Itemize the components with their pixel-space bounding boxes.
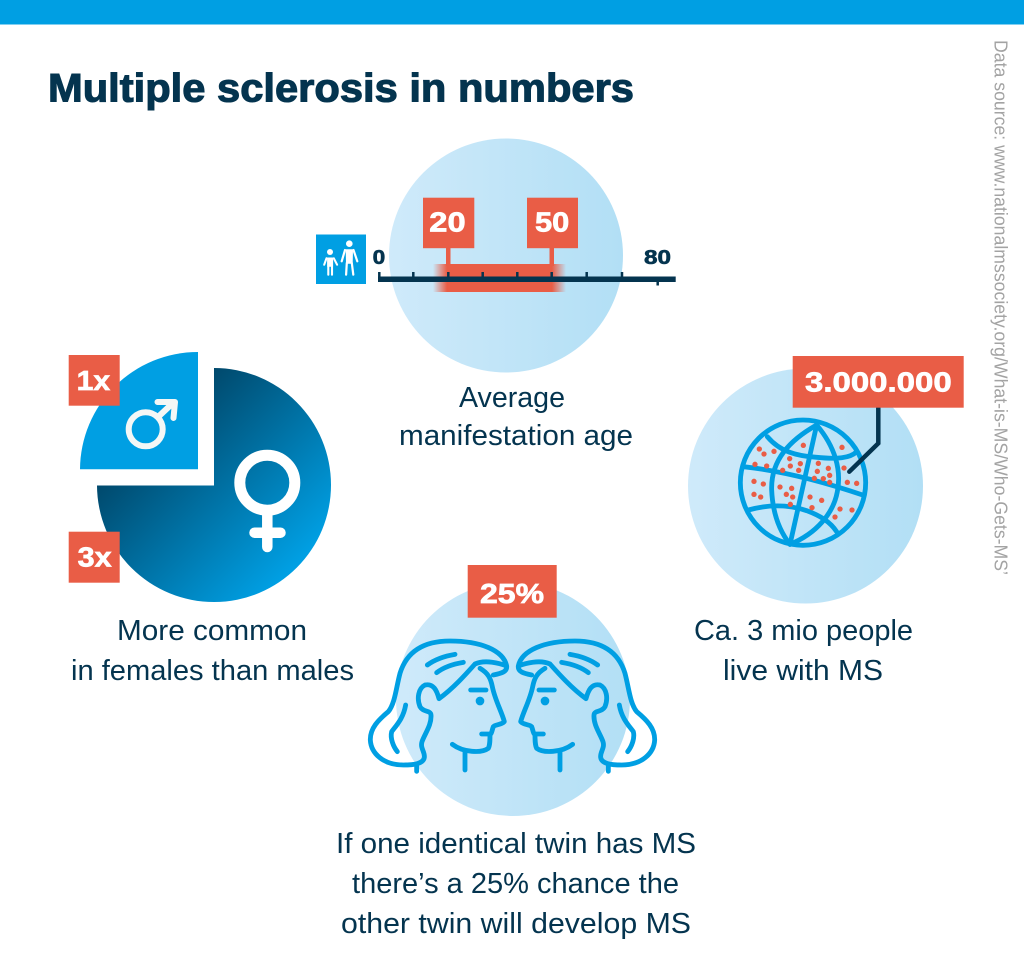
background circle: age — [389, 138, 623, 372]
badge: 3x — [69, 532, 120, 583]
pie slice: female — [97, 368, 331, 602]
marker: 50: 50 — [535, 207, 569, 238]
badge: 3.000.000 — [793, 356, 964, 408]
icon: female symbol — [240, 455, 295, 547]
data source: Data source: www.nationalmssociety.org/What-is-MS/Who-Gets-MS’ — [990, 40, 1010, 575]
caption: gender — [71, 615, 354, 687]
caption: age: Average — [459, 382, 565, 414]
icon: male symbol — [129, 402, 175, 446]
top bar — [0, 0, 1024, 24]
age range band — [433, 264, 566, 292]
caption: age: manifestation age — [399, 420, 633, 452]
badge: 3x: 3x — [78, 542, 112, 573]
marker: 20 — [423, 198, 474, 266]
caption: age — [399, 382, 633, 452]
icon: left twin head — [370, 641, 507, 771]
marker: 20: 20 — [429, 207, 466, 238]
caption: twins — [336, 828, 696, 940]
caption: gender: in females than males — [71, 655, 354, 687]
badge: 1x: 1x — [77, 365, 111, 396]
caption: gender: More common — [117, 615, 307, 647]
background circle: twins — [396, 582, 630, 816]
age axis — [378, 272, 676, 286]
marker: 50 — [527, 198, 578, 266]
icon: globe with dots — [740, 420, 866, 545]
leader line — [849, 405, 878, 472]
caption: twins: If one identical twin has MS — [336, 828, 696, 860]
axis label: 80: 80 — [644, 247, 671, 269]
axis label: 0: 0 — [373, 247, 385, 269]
badge: 25% — [468, 565, 557, 618]
caption: people: live with MS — [723, 655, 883, 687]
background circle: globe — [688, 368, 923, 604]
panel: twins — [336, 565, 696, 940]
caption: twins: there’s a 25% chance the — [352, 868, 679, 900]
icon: right twin head — [518, 641, 655, 771]
badge: 1x — [69, 355, 120, 406]
icon: parent and child — [316, 234, 366, 284]
caption: twins: other twin will develop MS — [341, 908, 691, 940]
caption: people: Ca. 3 mio people — [694, 615, 913, 647]
title: Multiple sclerosis in numbers — [48, 66, 634, 110]
badge: 25%: 25% — [480, 578, 544, 609]
caption: people — [694, 615, 913, 687]
panel: global prevalence — [688, 356, 964, 687]
panel: manifestation age — [316, 138, 676, 452]
panel: gender ratio — [69, 352, 354, 687]
pie slice: male — [80, 352, 198, 469]
badge: 3.000.000: 3.000.000 — [805, 367, 952, 398]
